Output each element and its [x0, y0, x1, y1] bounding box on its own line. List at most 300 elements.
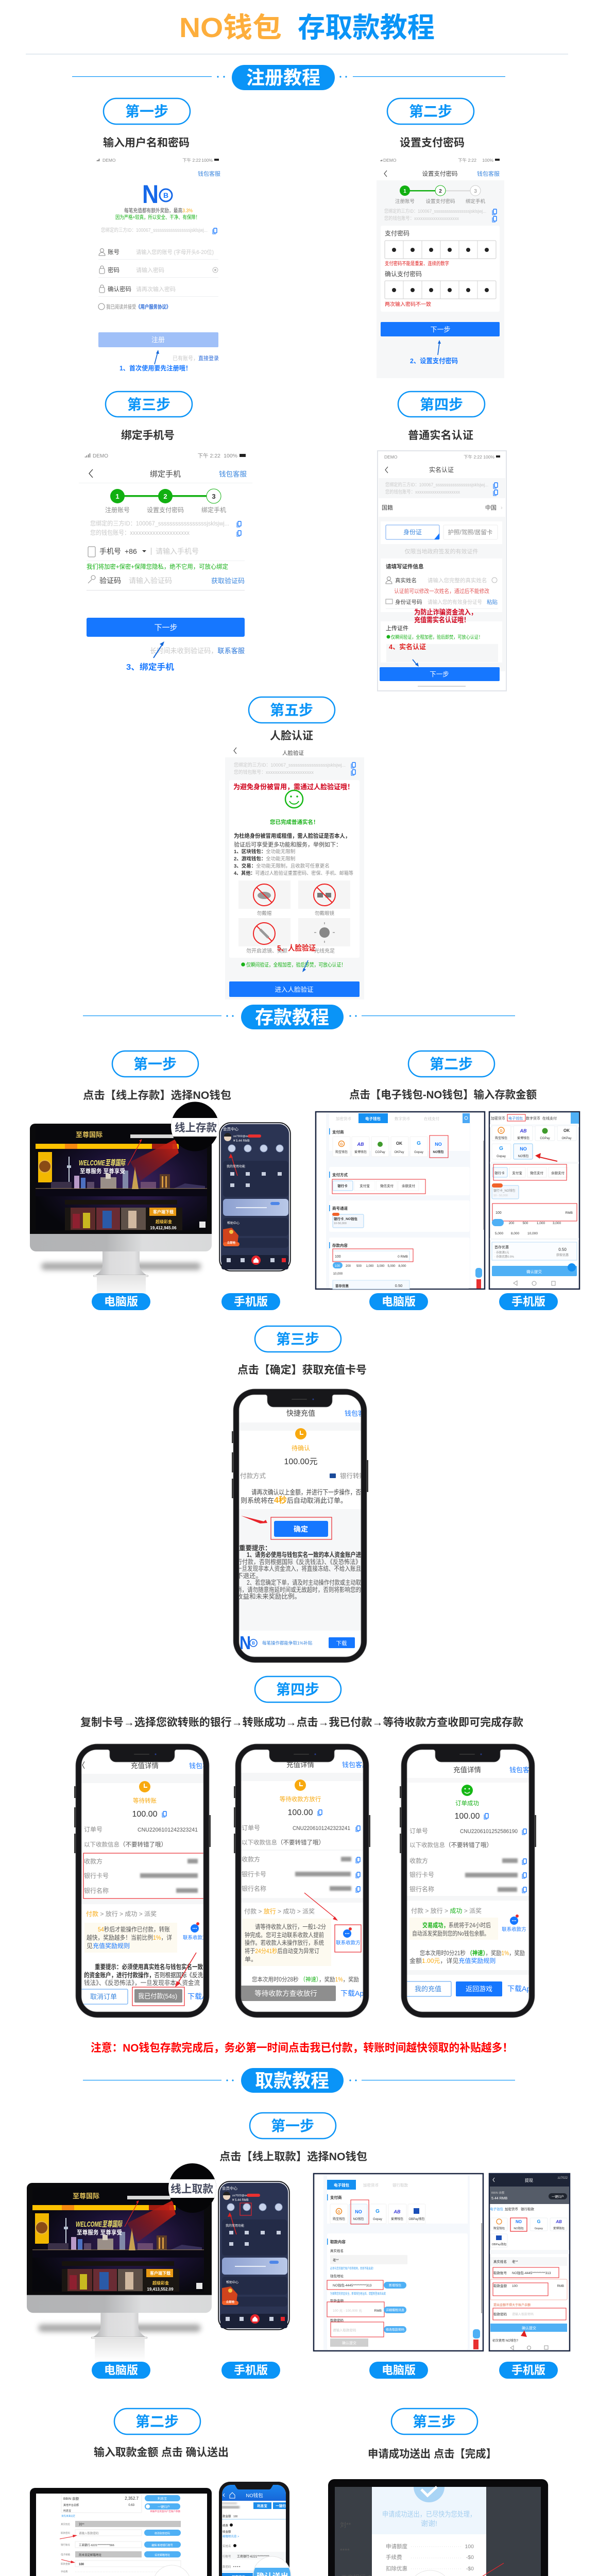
submit: 确认提交	[526, 1269, 542, 1274]
heading: register 3: 绑定手机号	[121, 429, 175, 442]
screen: real-name verification: 粘贴	[487, 599, 498, 605]
screen: register form: DEMO	[102, 158, 116, 163]
panel: desktop wallet withdraw form: 银行取款	[392, 2182, 408, 2188]
ID type tabs: 身份证	[403, 528, 422, 536]
step badge: deposit 4: 第四步	[276, 1682, 319, 1698]
phone: awaiting transfer: 等待转账	[133, 1797, 157, 1804]
panel: desktop wallet deposit form: 首存优惠	[335, 1283, 349, 1288]
monitor: withdraw form desktop: 银行账号	[61, 2543, 70, 2547]
screen: bind phone: 100%	[224, 453, 237, 459]
payment tiles: OK	[396, 1141, 402, 1146]
phone: confirm recharge: 则系统将在4秒后自动取消此订单。	[241, 1496, 347, 1505]
panel: desktop wallet withdraw form: 请输入取款密码	[333, 2328, 356, 2332]
phone: withdraw form mobile: 续费	[223, 2523, 229, 2528]
screen: register form: 每笔充值都有额外奖励，最高3.3%	[124, 207, 193, 214]
panel: mobile wallet withdraw form: zz7022	[558, 2177, 568, 2180]
phone: awaiting transfer: 重要提示：必须使用真实姓名与钱包实名一致	[95, 1963, 203, 1971]
phone: awaiting release: 请等待收款人放行，一般1-2分	[255, 1923, 326, 1930]
screen: set payment password: 您的钱包账号：xxxxxxxxxxxxxxxxxxxxx	[384, 215, 459, 222]
screen: real-name verification: 仅限当地政府签发的有效证件	[405, 548, 478, 555]
phone: awaiting release: 操作。若收款人未操作放行，系统	[245, 1939, 324, 1946]
monitor: application success: 手续费	[386, 2554, 402, 2561]
monitor: withdraw form desktop: 工商银行-6221***********566	[79, 2543, 114, 2547]
screen: register form: 1、首次使用要先注册哦！	[119, 364, 192, 372]
phone: order success: 订单成功	[455, 1800, 479, 1807]
phone: awaiting release: 付款 > 放行 > 成功 > 派奖	[244, 1907, 315, 1915]
section heading: 注册教程: 注册教程	[246, 67, 320, 88]
phone: dark member center withdraw: 立即抢	[226, 2300, 235, 2304]
panel: mobile wallet deposit form: Gopay	[497, 1155, 506, 1158]
screen: register form: 已有账号，直接登录	[173, 354, 219, 362]
arrow	[155, 350, 159, 364]
payment tiles: AB	[356, 1142, 364, 1147]
cancel button	[77, 1989, 128, 2004]
phone: awaiting release: 收款方	[242, 1855, 260, 1863]
arrow	[302, 960, 308, 972]
screen: set payment password	[377, 158, 504, 378]
section heading: 存款教程: 存款教程	[255, 1007, 329, 1028]
panel: mobile wallet deposit form	[489, 1112, 579, 1289]
payment tiles: 购宝钱包	[335, 1150, 348, 1154]
screen: register form: 下午 2:22	[182, 158, 201, 163]
screen: face verification: 勿戴帽	[257, 910, 271, 917]
progress stepper	[395, 185, 485, 205]
register button	[98, 332, 218, 347]
monitor: desktop homepage withdraw: 19,413,552.09	[147, 2287, 174, 2292]
screen: face verification: 2、游戏钱包：全功能无限制	[234, 856, 295, 862]
magnifier: confirm desktop	[155, 2565, 190, 2576]
phone: confirm recharge: 钱包客服	[345, 1410, 371, 1417]
section heading: 取款教程	[83, 2068, 515, 2093]
panel: desktop wallet withdraw form: 购宝钱包	[333, 2217, 345, 2221]
monitor: desktop homepage: 客户端下载	[153, 1209, 174, 1214]
download bar: 每笔操作都能争取1%补贴	[262, 1640, 313, 1646]
step badge: register 2	[387, 98, 474, 124]
panel: desktop wallet withdraw form: AB	[394, 2209, 401, 2214]
phone: awaiting release: 银行卡号	[242, 1871, 266, 1878]
panel: mobile wallet deposit form: 500	[523, 1222, 528, 1225]
phone: awaiting release: CNU2206101242323241	[293, 1825, 350, 1832]
monitor: withdraw form desktop: 真实姓名	[61, 2522, 70, 2526]
enter button	[229, 981, 360, 997]
monitor: desktop homepage withdraw	[27, 2183, 212, 2361]
step badge: register 1: 第一步	[125, 104, 168, 120]
panel: desktop wallet deposit form: 存款内容	[332, 1243, 348, 1248]
version pill: 手机版	[511, 2364, 545, 2377]
phone: withdraw form mobile: • • • •	[233, 2566, 240, 2569]
step badge: withdraw 3	[391, 2409, 477, 2434]
heading: register 1: 输入用户名和密码	[103, 137, 190, 149]
progress stepper: 设置支付密码	[425, 198, 455, 205]
payment tiles: Gopay	[414, 1151, 423, 1154]
monitor: withdraw form desktop: BBIN 余额	[63, 2496, 79, 2501]
panel: desktop wallet withdraw form: G	[337, 2210, 340, 2214]
panel: mobile wallet deposit form: 加密货币	[491, 1116, 505, 1121]
monitor: desktop homepage withdraw: 超级彩金	[152, 2280, 169, 2285]
panel: mobile wallet withdraw form: NO	[516, 2219, 522, 2224]
phone: awaiting transfer: 的资金账户，进行付款操作，否则根据国际《反洗	[84, 1971, 203, 1979]
panel: mobile wallet deposit form: AB	[519, 1128, 527, 1133]
monitor: application success: 刘**	[340, 2521, 351, 2529]
panel: desktop wallet deposit form: 100	[335, 1265, 340, 1268]
panel: mobile wallet withdraw form: 爱博钱包	[553, 2226, 565, 2230]
progress stepper: 设置支付密码	[147, 506, 184, 514]
phone: order success: 钱包客服	[509, 1766, 536, 1774]
phone: awaiting transfer: 见充值奖励规则	[87, 1942, 130, 1950]
phone: order success: 银行卡号	[409, 1871, 434, 1878]
phone: confirm recharge: 不退还。	[236, 1572, 262, 1580]
monitor: application success: 100	[465, 2544, 474, 2550]
phone: confirm recharge: 行付款，否则根据国际《反洗钱法》、《反恐怖法》	[236, 1558, 361, 1566]
payment tiles	[333, 1136, 448, 1158]
screen: bind phone: 我们将加密+保密+保障您隐私，绝不它用，可放心绑定	[87, 563, 228, 570]
pay method chips: 银行卡	[337, 1183, 348, 1188]
phone: order success: 以下收款信息（不要转错了哦）	[409, 1841, 492, 1849]
phone: order success: 下载App	[507, 1985, 535, 1993]
panel: mobile wallet withdraw form: RMB	[557, 2285, 564, 2288]
phone: awaiting transfer: 钱法》、《反恐怖法》，一旦发现非本人资金流	[84, 1979, 200, 1987]
screen: real-name verification: 上传证件	[386, 625, 408, 632]
screen: set payment password: 支付密码不能是重复、连续的数字	[385, 260, 449, 267]
section heading: 取款教程: 取款教程	[255, 2070, 329, 2091]
phone: awaiting release: 100.00	[288, 1808, 313, 1817]
screen: register form: 密码	[108, 266, 119, 274]
screen: set payment password: 下午 2:22	[458, 158, 476, 163]
password boxes	[385, 241, 496, 259]
panel: desktop wallet deposit form	[316, 1112, 485, 1289]
monitor: withdraw form desktop: 手续费	[61, 2570, 68, 2573]
panel: desktop wallet withdraw form: 新增钱包	[389, 2283, 401, 2287]
panel: desktop wallet deposit form: 3,000	[377, 1265, 385, 1268]
phone: withdraw form mobile: 100	[233, 2515, 238, 2518]
monitor: desktop homepage: 至尊服务 至尊享受	[80, 1167, 125, 1175]
panel: desktop wallet withdraw form: 爱博钱包	[391, 2217, 403, 2221]
monitor: withdraw form desktop: 请先填满设定	[61, 2514, 75, 2518]
screen: real-name verification: 实名认证	[429, 466, 454, 473]
version pill	[499, 1293, 558, 1310]
panel: desktop wallet withdraw form: RMB	[374, 2309, 382, 2313]
my recharge button: 我的充值	[415, 1985, 441, 1993]
phone: order success: 订单号	[409, 1827, 428, 1835]
screen: real-name verification: ›	[501, 505, 503, 511]
arrow	[153, 641, 164, 658]
screen: bind phone: 您的钱包账号：xxxxxxxxxxxxxxxxxxxxx	[90, 529, 190, 536]
step badge: register 5: 第五步	[270, 702, 313, 718]
panel: desktop wallet deposit form: 支付商	[332, 1129, 344, 1134]
heading: register 2: 设置支付密码	[400, 137, 465, 149]
phone: confirm recharge: 1、请务必使用与钱包实名一致的本人资金账户进	[247, 1551, 361, 1558]
panel: desktop wallet deposit form: 0.50	[395, 1283, 402, 1288]
version pill	[92, 2362, 150, 2379]
panel: desktop wallet withdraw form: 取款金额	[330, 2298, 344, 2303]
panel: mobile wallet withdraw form: 取款密码	[493, 2312, 507, 2316]
phone: awaiting transfer: 钱包客服	[189, 1762, 216, 1770]
phone: awaiting release: 将于24分41秒后自动变为异常订	[245, 1947, 319, 1955]
panel: mobile wallet deposit form: RMB	[566, 1211, 573, 1215]
screen: register form: 请再次输入密码	[136, 285, 176, 293]
phone: order success: 付款 > 放行 > 成功 > 派奖	[411, 1907, 482, 1914]
phone: awaiting transfer: 订单号	[84, 1826, 102, 1833]
screen: register form: 账号	[108, 249, 119, 256]
screen: real-name verification: 国籍	[382, 504, 393, 511]
amount input	[333, 1249, 413, 1262]
title	[179, 12, 435, 43]
screen: face verification: 为杜绝身份被冒用或租借，需人脸验证是否本人，	[234, 832, 350, 839]
phone: order success: 充值详情	[453, 1766, 481, 1774]
monitor: withdraw form desktop: 将报平台资金归户至账户余额	[150, 2510, 180, 2513]
panel: desktop wallet withdraw form: 老**	[333, 2258, 339, 2262]
monitor: application success: 扣除优惠	[386, 2565, 407, 2572]
panel: desktop wallet deposit form: 加密货币	[336, 1116, 351, 1121]
screen: real-name verification: 仅瞬间验证，全程加密，验后即焚，可放心认证！	[391, 634, 483, 640]
version pill	[369, 1293, 428, 1310]
phone: withdraw form mobile: 工商银行-6221**********	[237, 2554, 269, 2558]
monitor: withdraw form desktop: 利息宝	[158, 2497, 167, 2501]
phone: order success: 自动派发奖励到您的No钱包余额。	[412, 1929, 489, 1937]
panel: desktop wallet deposit form: 电子钱包	[365, 1116, 381, 1121]
callout: online withdraw	[167, 2163, 217, 2213]
icon: NO logo: B	[163, 191, 168, 199]
phone: withdraw form mobile: 实姓名	[223, 2544, 231, 2548]
panel: mobile wallet withdraw form: 提出金额不得大于账户余额	[493, 2303, 531, 2307]
title: 存取款教程	[298, 12, 435, 43]
screen: face verification: 勿开启滤镜、美颜	[246, 947, 287, 954]
screen: set payment password: 您绑定的三方ID：100067_sssssssssssssssssjsklsjwj...	[384, 208, 486, 214]
progress stepper: 1	[115, 493, 119, 500]
screen: set payment password: 2、设置支付密码	[410, 357, 458, 365]
red note	[414, 608, 477, 624]
step badge: register 2: 第二步	[409, 104, 452, 120]
panel: mobile wallet deposit form: NO	[520, 1146, 527, 1151]
paid button	[132, 1987, 184, 2006]
screen: real-name verification: 身份证号码	[395, 599, 422, 605]
arrow	[438, 340, 441, 355]
phone: awaiting release: 钱包客服	[342, 1761, 369, 1769]
screen: face verification: 为避免身份被冒用，需通过人脸验证哦！	[233, 783, 354, 791]
panel: desktop wallet withdraw form: NO	[355, 2209, 362, 2214]
register button: 注册	[151, 336, 165, 344]
panel: mobile wallet deposit form: 8,000	[511, 1232, 520, 1235]
monitor: desktop homepage	[30, 1124, 212, 1299]
monitor: withdraw form desktop: 刘**	[79, 2522, 84, 2527]
red arrow	[241, 1516, 267, 1523]
panel: mobile wallet withdraw form: 提现	[525, 2178, 533, 2183]
panel: desktop wallet withdraw form: 加密货币	[363, 2182, 379, 2188]
panel: mobile wallet deposit form: 爱博钱包	[517, 1136, 529, 1140]
phone: confirm recharge: 重要提示：	[239, 1544, 271, 1552]
step badge: register 1	[104, 98, 190, 124]
amount input: 0 RMB	[398, 1255, 408, 1259]
panel: desktop wallet withdraw form: 钱包地址	[330, 2274, 344, 2278]
phone: withdraw form mobile: NO钱包	[246, 2493, 263, 2499]
screen: register form: 请输入您的账号 (字母开头6-20位)	[136, 248, 214, 256]
panel: desktop wallet withdraw form: 为保障您的资金安全，新增钱包地址后，请重新登录后出款	[330, 2292, 386, 2296]
panel: desktop wallet deposit form: 在线支付	[424, 1116, 439, 1121]
heading: register 4: 普通实名认证	[408, 429, 473, 442]
next button	[380, 667, 500, 681]
screen: real-name verification: 您绑定的三方ID：100067_sssssssssssssssssjsklsjwj...	[385, 482, 488, 488]
heading: deposit 2: 点击【电子钱包-NO钱包】输入存款金额	[349, 1089, 537, 1101]
section heading: 存款教程	[83, 1005, 515, 1029]
pay method chips: 余额支付	[402, 1183, 415, 1188]
phone: order success: CNU2206101252586190	[460, 1828, 518, 1835]
screen: set payment password: 两次输入密码不一致	[385, 301, 431, 308]
panel: desktop wallet withdraw form: G	[375, 2209, 380, 2214]
screen: bind phone: 下午 2:22	[198, 452, 220, 459]
callout: online deposit: 线上存款	[175, 1122, 217, 1134]
panel: desktop wallet withdraw form: OBPay钱包	[408, 2217, 425, 2221]
phone: dark member center withdraw: 我的常用功能	[226, 2224, 244, 2228]
screen: bind phone: 获取验证码	[211, 577, 245, 585]
red arrow	[304, 1893, 338, 1921]
red arrow	[175, 1953, 196, 1987]
phone: dark member center withdraw: ¥ 5.44 RMB	[232, 2199, 249, 2202]
panel: mobile wallet deposit form: · 存款优惠0.5%	[494, 1255, 514, 1259]
screen: face verification: 3、交易：全功能无限制，且收款可任意更名	[234, 863, 330, 869]
phone: awaiting transfer: 联系收款方	[183, 1935, 208, 1941]
panel: mobile wallet deposit form: 5,000	[495, 1232, 504, 1235]
phone: order success: 联系收款方	[502, 1926, 526, 1933]
section heading: 注册教程	[72, 65, 505, 90]
step badge: deposit 3: 第三步	[276, 1331, 319, 1347]
phone: order success: 交易成功，系统将于24小时后	[422, 1921, 491, 1929]
panel: desktop wallet deposit form: 200	[346, 1265, 351, 1268]
phone: dark member center: 我的常用功能	[227, 1164, 245, 1168]
panel: mobile wallet withdraw form: 取款账号	[493, 2270, 507, 2275]
panel: desktop wallet withdraw form: NO钱包	[353, 2217, 364, 2221]
payment tiles: NO钱包	[433, 1150, 444, 1154]
panel: mobile wallet withdraw form: 真实姓名	[493, 2259, 507, 2264]
phone: order success: 银行名称	[409, 1885, 434, 1893]
panel: desktop wallet withdraw form: Gopay	[373, 2218, 382, 2221]
payment tiles: CGPay	[375, 1151, 385, 1154]
panel: desktop wallet withdraw form: 取款密码	[330, 2318, 344, 2323]
panel: mobile wallet deposit form: 购宝钱包	[495, 1136, 507, 1140]
panel: desktop wallet deposit form: 10-50,000	[334, 1222, 347, 1225]
panel: desktop wallet withdraw form: 修改取款密码	[386, 2328, 404, 2332]
monitor: withdraw form desktop: 利息宝	[63, 2509, 71, 2513]
version pill	[499, 2362, 558, 2379]
step badge: withdraw 1	[250, 2113, 336, 2139]
screen: real-name verification: 您的钱包账号：xxxxxxxxxxxxxxxxxxxxx	[385, 489, 460, 495]
monitor: withdraw form desktop: 其他平台总额	[63, 2503, 79, 2507]
submit	[492, 1266, 577, 1276]
monitor: withdraw form desktop: 2,352.7	[125, 2496, 139, 2501]
phone: withdraw form mobile: 利息宝	[257, 2503, 267, 2508]
step badge: deposit 3	[255, 1326, 341, 1352]
phone: order success: 您本次用时0分21秒 （神速），奖励1%，奖励	[420, 1949, 525, 1957]
step badge: deposit 1: 第一步	[133, 1056, 177, 1072]
screen: bind phone: 手机号	[99, 547, 121, 555]
panel: mobile wallet withdraw form: 一键归户	[552, 2195, 564, 2199]
panel: mobile wallet deposit form: G	[499, 1146, 503, 1151]
step badge: register 4	[398, 392, 485, 417]
return button: 返回游戏	[466, 1985, 492, 1993]
monitor: application success: 申请成功送出，已尽快为您处理，	[382, 2510, 476, 2518]
panel: desktop wallet deposit form: 1,000	[366, 1265, 374, 1268]
progress stepper	[105, 489, 226, 514]
panel: desktop wallet withdraw form: 取款内容	[330, 2239, 346, 2244]
step badge: deposit 2: 第二步	[430, 1056, 473, 1072]
payment tiles: NO	[435, 1142, 442, 1147]
step badge: register 5	[249, 697, 335, 723]
heading: withdraw 1: 点击【线上取款】选择NO钱包	[219, 2151, 367, 2163]
screen: bind phone: 3、绑定手机	[126, 662, 174, 672]
panel: mobile wallet withdraw form: 请输入取款密码	[512, 2312, 534, 2316]
phone: awaiting transfer: 付款 > 放行 > 成功 > 派奖	[86, 1910, 157, 1918]
monitor: desktop homepage withdraw: WELCOME至尊国际	[76, 2220, 123, 2229]
version pill	[221, 1293, 280, 1310]
screen: face verification: 5、人脸验证	[277, 943, 316, 953]
ID type tabs	[386, 525, 498, 539]
screen: face verification: 4、其他：可通过人脸验证重置密码、密保、手机、邮箱等	[234, 870, 353, 876]
phone: confirm recharge: 收益和未来奖励比例。	[236, 1593, 301, 1600]
callout: online withdraw: 线上取款	[170, 2183, 213, 2195]
step badge: register 3	[106, 392, 192, 417]
step badge: deposit 2	[408, 1051, 494, 1077]
deposit notice: 注意：NO钱包存款完成后，务必第一时间点击我已付款，转账时间越快领取的补贴越多！	[91, 2041, 513, 2054]
icon tiles	[238, 880, 350, 946]
screen: bind phone: 长时间未收到验证码，联系客服	[150, 647, 245, 655]
panel: mobile wallet deposit form: 10 - 50,000	[493, 1194, 508, 1197]
callout: online deposit	[170, 1101, 220, 1151]
phone: dark member center withdraw: 会员中心	[222, 2185, 237, 2191]
contact highlight: 联系收款方	[336, 1940, 361, 1946]
screen: face verification: 仅瞬间验证，全程加密，验后即焚，可放心认证！	[246, 961, 346, 968]
step badge: withdraw 1: 第一步	[271, 2118, 314, 2134]
phone: awaiting release: 等待收款方放行	[280, 1795, 321, 1803]
return button	[456, 1981, 502, 1996]
phone: confirm recharge: 待确认	[292, 1445, 310, 1452]
panel: mobile wallet deposit form: OKPay	[561, 1137, 572, 1140]
phone: dark member center withdraw: zz7022@xx	[232, 2194, 247, 2197]
panel: desktop wallet withdraw form: NO钱包-4445**********313	[333, 2283, 372, 2287]
phone: awaiting release: 以下收款信息（不要转错了哦）	[242, 1839, 324, 1846]
screen: real-name verification: 100%	[483, 454, 494, 460]
screen: bind phone: 请输入手机号	[156, 547, 199, 555]
progress stepper: 注册账号	[395, 198, 415, 205]
phone: dark member center withdraw	[218, 2181, 289, 2330]
screen: bind phone: DEMO	[93, 453, 108, 459]
progress stepper: 3	[474, 189, 477, 194]
phone: awaiting release: 您本次用时0分28秒 （神速），奖励1%，奖励	[252, 1976, 359, 1983]
next button	[87, 618, 245, 637]
enter button: 进入人脸验证	[275, 986, 314, 993]
phone: awaiting release: 银行名称	[242, 1885, 266, 1892]
panel: mobile wallet deposit form: G	[500, 1129, 503, 1133]
confirm button: 确定	[294, 1525, 308, 1533]
screen: register form: 请输入密码	[136, 266, 164, 274]
phone: order success: 100.00	[455, 1812, 480, 1821]
monitor: application success: 谢谢!	[421, 2519, 437, 2528]
next button	[381, 322, 500, 336]
red arrow: done	[455, 2563, 504, 2576]
monitor: withdraw form desktop: 电子邮箱	[61, 2553, 70, 2556]
monitor: desktop homepage: 超级彩金	[156, 1219, 172, 1224]
step badge: withdraw 2: 第二步	[135, 2414, 179, 2430]
panel: mobile wallet deposit form: 10,000	[527, 1232, 538, 1235]
panel: desktop wallet deposit form: 银行卡_NO钱包	[334, 1216, 357, 1221]
heading: deposit 4: 复制卡号→选择您欲转账的银行→转账成功→点击→我已付款→等待收款方查收即可完成存款	[80, 1716, 523, 1728]
screen: face verification: 您绑定的三方ID：100067_sssssssssssssssssjsklsjwj...	[234, 762, 346, 768]
panel: desktop wallet deposit form: 500	[356, 1265, 362, 1268]
step badge: register 4: 第四步	[420, 397, 463, 413]
phone: withdraw form mobile: 一键归	[276, 2503, 286, 2508]
screen: register form: 钱包客服	[198, 170, 220, 177]
screen: face verification: 您已完成普通实名！	[270, 819, 318, 825]
monitor: withdraw form desktop: 0.63	[128, 2504, 135, 2507]
pay method chips	[332, 1179, 425, 1194]
